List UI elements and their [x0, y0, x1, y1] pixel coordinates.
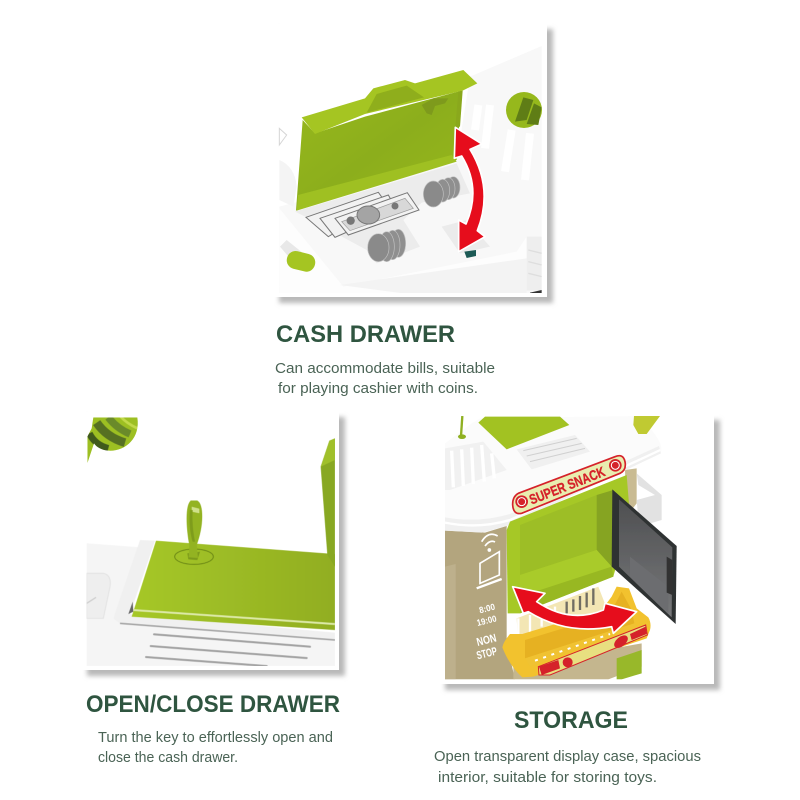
- text: storage description: Open transparent display case, spacious: [434, 748, 701, 765]
- text: storage description: interior, suitable for storing toys.: [438, 769, 657, 786]
- tan print text: NON: [475, 632, 498, 649]
- heading: storage: STORAGE: [514, 707, 628, 734]
- panel: open close drawer photo: [82, 412, 345, 676]
- green top panel: [478, 417, 569, 449]
- tan print text: [476, 604, 496, 659]
- tan print text: 19:00: [476, 613, 498, 628]
- white counter: [87, 543, 335, 666]
- button: round green dial: [506, 92, 542, 128]
- tan print text: STOP: [475, 646, 499, 662]
- text: cash drawer description: Can accommodate bills, suitable: [275, 360, 495, 377]
- green drawer plate: [132, 541, 335, 630]
- green compartment: [507, 475, 630, 613]
- heading: open close drawer: OPEN/CLOSE DRAWER: [86, 691, 340, 718]
- banknotes: [306, 192, 419, 237]
- vent panel: [517, 435, 590, 469]
- arrow: red double arrow swing: [513, 587, 637, 633]
- toy body: white counter: [278, 94, 542, 293]
- lock slot: [464, 250, 476, 258]
- button: oval green: [280, 240, 317, 274]
- panel: storage photo: [440, 414, 720, 690]
- panel: cash drawer photo: [274, 24, 553, 303]
- text: cash drawer description: for playing cashier with coins.: [278, 380, 478, 397]
- storage basket ribs: [516, 586, 604, 634]
- text: open close drawer description: Turn the key to effortlessly open and: [98, 729, 333, 746]
- dark transparent door: [612, 489, 677, 624]
- text: open close drawer description: close the cash drawer.: [98, 749, 238, 766]
- yellow green knob: [633, 416, 660, 434]
- key: [175, 501, 213, 564]
- coin stack: back: [423, 177, 460, 207]
- heading: cash drawer: CASH DRAWER: [276, 321, 455, 348]
- green lid: [296, 91, 462, 211]
- drawer well: [295, 163, 470, 263]
- tan laptop wifi print: [477, 534, 502, 588]
- coin stack: front: [368, 229, 406, 262]
- arrow: open close red double arrow: [454, 127, 485, 252]
- antenna: [461, 416, 462, 436]
- vents: [146, 634, 310, 666]
- green dial corner: [87, 417, 140, 465]
- tan print text: 8:00: [478, 602, 496, 615]
- grey side bracket: [637, 473, 662, 527]
- green side wall: [321, 438, 335, 567]
- yellow basket: [502, 587, 651, 677]
- white roof: [445, 518, 507, 533]
- sign: super snack: SUPER SNACK: [527, 463, 607, 507]
- tan toy body: [445, 517, 515, 679]
